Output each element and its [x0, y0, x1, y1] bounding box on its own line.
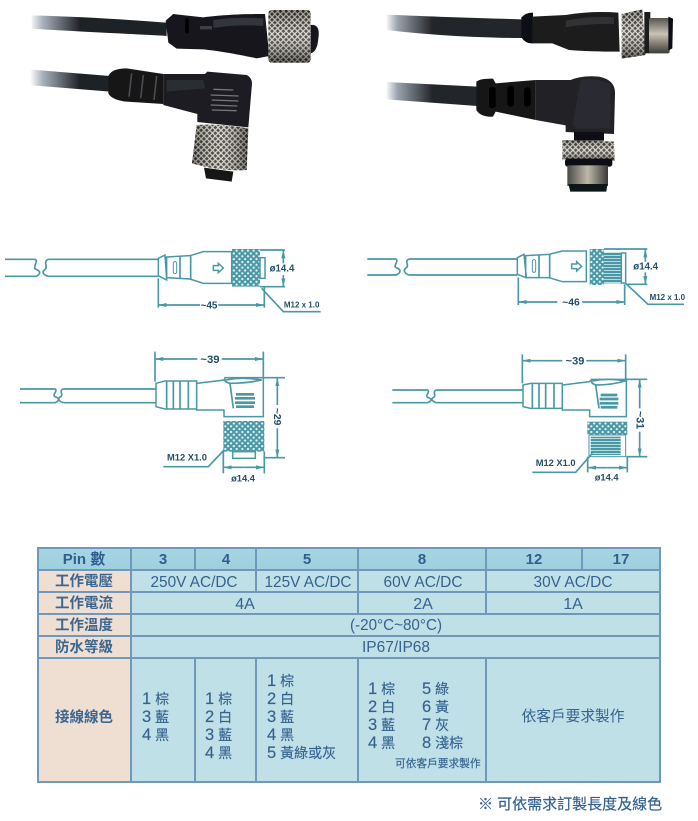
current row: 1A [563, 596, 583, 613]
wire colours: 8 pin: 3 藍 [368, 716, 395, 734]
wire colours: 4 pin [205, 690, 232, 762]
drawing: angled male dimensions: ~31 [633, 411, 645, 429]
wire colours: 4 pin: 1 棕 [205, 690, 232, 708]
dimension labels: ø14.4 [270, 263, 295, 274]
cable outline [392, 390, 523, 403]
photo: male M12 cable connectors [386, 9, 673, 192]
wire colours: 8 pin: 7 灰 [422, 716, 449, 734]
drawing: straight male dimensions: M12 x 1.0 [650, 293, 686, 302]
wire colours: 8 pin: 可依客戶要求製作 [395, 757, 481, 770]
wire colours: 8 pin: 6 黃 [422, 698, 449, 716]
wire colours: 8 pin: 2 白 [368, 698, 395, 716]
dimension labels: ~39 [566, 355, 584, 367]
header row [63, 551, 629, 568]
cable outline [367, 259, 517, 275]
arrow mark [572, 262, 582, 271]
drawing: straight male dimensions [367, 249, 686, 309]
arrow mark [213, 263, 223, 273]
dimension lines [158, 250, 321, 312]
dimension lines [155, 352, 285, 473]
drawing: straight female dimensions [5, 249, 321, 312]
drawing: angled female dimensions: M12 X1.0 [167, 453, 207, 463]
knurled nut [232, 249, 260, 287]
ingress protection row: IP67/IP68 [362, 639, 430, 656]
photo: female M12 cable connectors [28, 10, 319, 182]
row labels: 工作溫度 [55, 616, 113, 634]
drawing: straight male dimensions: ~46 [562, 298, 580, 309]
angled female connector [28, 68, 252, 182]
drawing: straight female dimensions: M12 x 1.0 [284, 300, 320, 309]
dimension lines [522, 354, 647, 472]
wire colours: 12 and 17 pin: 依客戶要求製作 [522, 708, 625, 725]
wire colours: 8 pin: 8 淺棕 [422, 734, 463, 752]
angled male connector [386, 76, 615, 192]
straight female connector [32, 10, 319, 63]
header row: 5 [303, 551, 311, 568]
dimension labels: ø14.4 [633, 262, 659, 273]
wire colours: 3 pin: 3 藍 [142, 708, 169, 726]
current row: 2A [413, 596, 433, 613]
dimension lines [518, 249, 684, 305]
header row: 8 [418, 551, 426, 568]
drawing: angled female dimensions [20, 352, 285, 484]
drawing: angled male dimensions [392, 354, 647, 482]
wire colours: 5 pin: 3 藍 [267, 708, 294, 726]
header row: 3 [159, 551, 167, 568]
dimension labels: ~39 [200, 354, 220, 366]
wire colours: 5 pin: 1 棕 [267, 672, 294, 690]
connector body [158, 252, 232, 283]
wire colours: 5 pin: 4 黑 [267, 726, 294, 744]
knurled nut and thread [590, 249, 604, 285]
row labels: 工作電壓 [55, 573, 113, 590]
wire colours: 8 pin: 5 綠 [422, 680, 449, 698]
header row: Pin 數 [63, 551, 105, 568]
connector body [517, 251, 586, 282]
strain relief and elbow [523, 383, 562, 408]
current row: 4A [235, 596, 255, 613]
wire colours: 5 pin [267, 672, 336, 762]
cable outline [5, 259, 158, 276]
footnote: ※ 可依需求訂製長度及線色 [478, 796, 662, 813]
wire colours: 3 pin: 4 黑 [142, 726, 169, 744]
wire colours: 4 pin: 3 藍 [205, 726, 232, 744]
row labels: 工作電流 [55, 594, 113, 612]
table backgrounds [38, 548, 660, 782]
wire colours: 5 pin: 5 黃綠或灰 [267, 744, 336, 762]
cable outline [20, 389, 156, 403]
row labels [55, 573, 113, 726]
wire colours: 3 pin: 1 棕 [142, 690, 169, 708]
wire colours: 4 pin: 2 白 [205, 708, 232, 726]
strain relief and elbow [156, 381, 197, 409]
straight male connector [386, 9, 673, 59]
voltage row: 250V AC/DC [150, 574, 238, 591]
wire colours: 5 pin: 2 白 [267, 690, 294, 708]
drawing: angled female dimensions: ø14.4 [231, 474, 256, 484]
current row [235, 596, 583, 613]
voltage row [150, 574, 612, 591]
spec table [38, 548, 660, 782]
wire colours: 8 pin: 4 黑 [368, 734, 395, 752]
header row: 4 [222, 551, 231, 568]
wire colours: 3 pin [142, 690, 169, 744]
knurled nut and thread [587, 422, 627, 435]
drawing: straight female dimensions: ~45 [201, 300, 218, 311]
header row: 17 [613, 551, 629, 568]
wire colours: 8 pin: 1 棕 [368, 680, 395, 698]
drawing: angled male dimensions: M12 X1.0 [536, 458, 576, 468]
voltage row: 60V AC/DC [384, 574, 462, 591]
temperature row: (-20°C~80°C) [350, 617, 442, 634]
voltage row: 30V AC/DC [534, 574, 612, 591]
row labels: 接線線色 [55, 708, 113, 726]
voltage row: 125V AC/DC [264, 574, 352, 591]
row labels: 防水等級 [55, 638, 113, 656]
table grid [38, 548, 660, 782]
knurled nut [223, 421, 264, 452]
wire colours: 4 pin: 4 黑 [205, 744, 232, 762]
header row: 12 [526, 551, 542, 568]
drawing: angled male dimensions: ø14.4 [595, 472, 619, 482]
wire colours: 8 pin [368, 680, 481, 770]
drawing: angled female dimensions: ~29 [271, 408, 282, 426]
